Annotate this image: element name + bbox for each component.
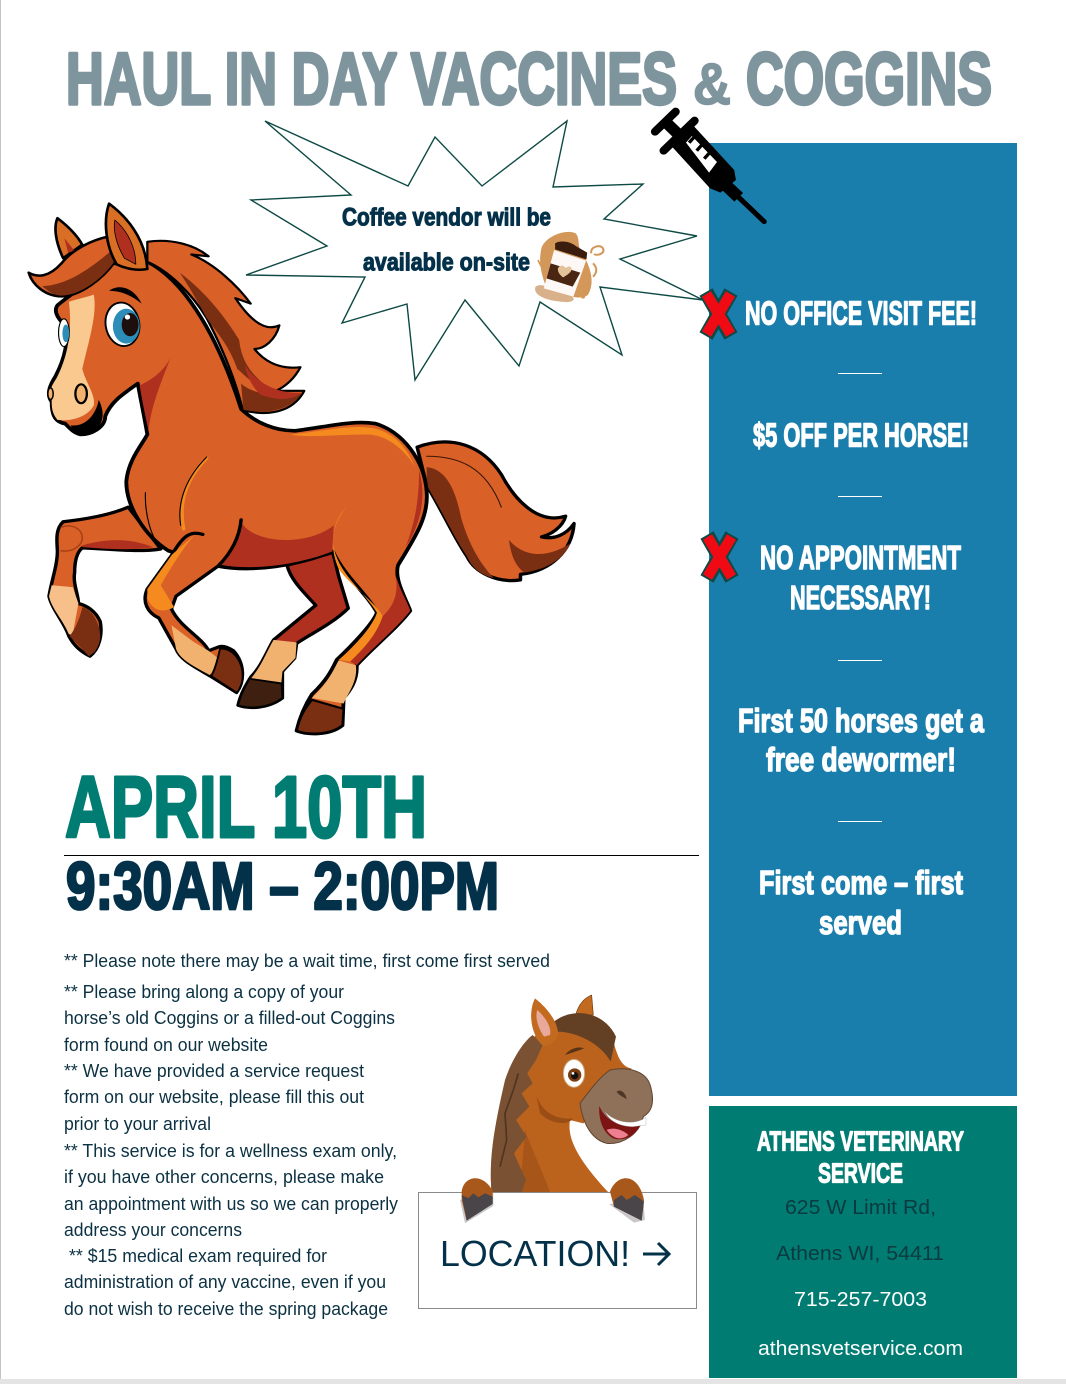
mouth	[71, 400, 103, 434]
mane	[491, 1035, 543, 1193]
icon: red x 2	[707, 535, 732, 579]
benefit: no appointment necessary: NECESSARY!	[790, 580, 931, 617]
notes text: address your concerns	[64, 1220, 242, 1240]
far ear	[55, 218, 82, 258]
near hind highlight	[333, 507, 383, 662]
location sign with smiling horse	[418, 995, 696, 1308]
notes text: ** Please bring along a copy of your	[64, 982, 344, 1002]
eyes	[103, 300, 142, 348]
tail	[417, 442, 574, 581]
mane	[147, 241, 304, 413]
clinic name: SERVICE	[818, 1158, 903, 1188]
muzzle	[580, 1069, 653, 1143]
near ear	[106, 204, 147, 270]
notes text: do not wish to receive the spring package	[64, 1299, 388, 1319]
eye	[563, 1059, 585, 1087]
forelock	[29, 236, 115, 296]
starburst callout	[246, 121, 703, 380]
panel: contact	[709, 1106, 1017, 1378]
benefit: free dewormer: First 50 horses get a	[738, 703, 984, 740]
callout text	[342, 204, 551, 276]
notes text: ** $15 medical exam required for	[69, 1246, 327, 1266]
time: 9:30AM – 2:00PM	[66, 849, 499, 924]
benefit: first come first served: served	[819, 905, 902, 942]
near front leg	[145, 520, 242, 693]
icon: syringe	[655, 112, 764, 222]
notes text: an appointment with us so we can properly	[64, 1194, 398, 1214]
callout text: Coffee vendor will be	[342, 204, 551, 232]
title: &	[693, 52, 731, 117]
blaze	[50, 295, 95, 420]
notes text: form on our website, please fill this out	[64, 1087, 364, 1107]
benefit: free dewormer	[738, 703, 984, 779]
website: athensvetservice.com	[758, 1338, 963, 1360]
benefit: first come first served: First come – first	[759, 865, 963, 902]
ear	[531, 998, 558, 1046]
clinic name: ATHENS VETERINARY	[757, 1126, 964, 1156]
panel: benefits	[709, 143, 1017, 1096]
raised front leg	[49, 507, 161, 656]
notes text: prior to your arrival	[64, 1114, 211, 1134]
icon: red x 1	[706, 292, 731, 336]
clinic name	[757, 1126, 964, 1188]
illustration: running horse	[29, 204, 574, 734]
notes text: ** Please note there may be a wait time, first come first served	[64, 951, 550, 971]
benefit: free dewormer: free dewormer!	[766, 742, 956, 779]
title: HAUL IN DAY VACCINES	[66, 39, 677, 120]
arrow	[643, 1243, 669, 1265]
notes text: ** We have provided a service request	[64, 1061, 364, 1081]
belly shading	[220, 522, 334, 567]
benefit: no appointment necessary: NO APPOINTMENT	[760, 540, 961, 577]
date: APRIL 10TH	[65, 759, 427, 856]
mouth	[599, 1106, 642, 1139]
street address: 625 W Limit Rd,	[785, 1197, 936, 1219]
shoulder crease	[182, 458, 207, 529]
notes text: form found on our website	[64, 1035, 268, 1055]
notes text: if you have other concerns, please make	[64, 1167, 384, 1187]
benefit: first come first served	[759, 865, 963, 942]
city: Athens WI, 54411	[776, 1243, 944, 1265]
illustration: smiling horse	[491, 995, 653, 1193]
callout text: available on-site	[363, 248, 530, 276]
sign board	[418, 1192, 696, 1308]
near hind fetlock and hoof	[312, 661, 356, 703]
location label: LOCATION!	[440, 1233, 630, 1274]
notes text: horse’s old Coggins or a filled-out Coggins	[64, 1008, 395, 1028]
notes text	[64, 951, 550, 1319]
paws	[460, 1178, 645, 1223]
icon: coffee cup	[535, 232, 603, 302]
notes text: ** This service is for a wellness exam only,	[64, 1141, 397, 1161]
body, neck and head	[49, 262, 427, 734]
notes text: administration of any vaccine, even if you	[64, 1272, 386, 1292]
benefit: no appointment necessary	[760, 540, 961, 617]
far hind leg	[238, 553, 348, 707]
phone: 715-257-7003	[794, 1289, 927, 1311]
